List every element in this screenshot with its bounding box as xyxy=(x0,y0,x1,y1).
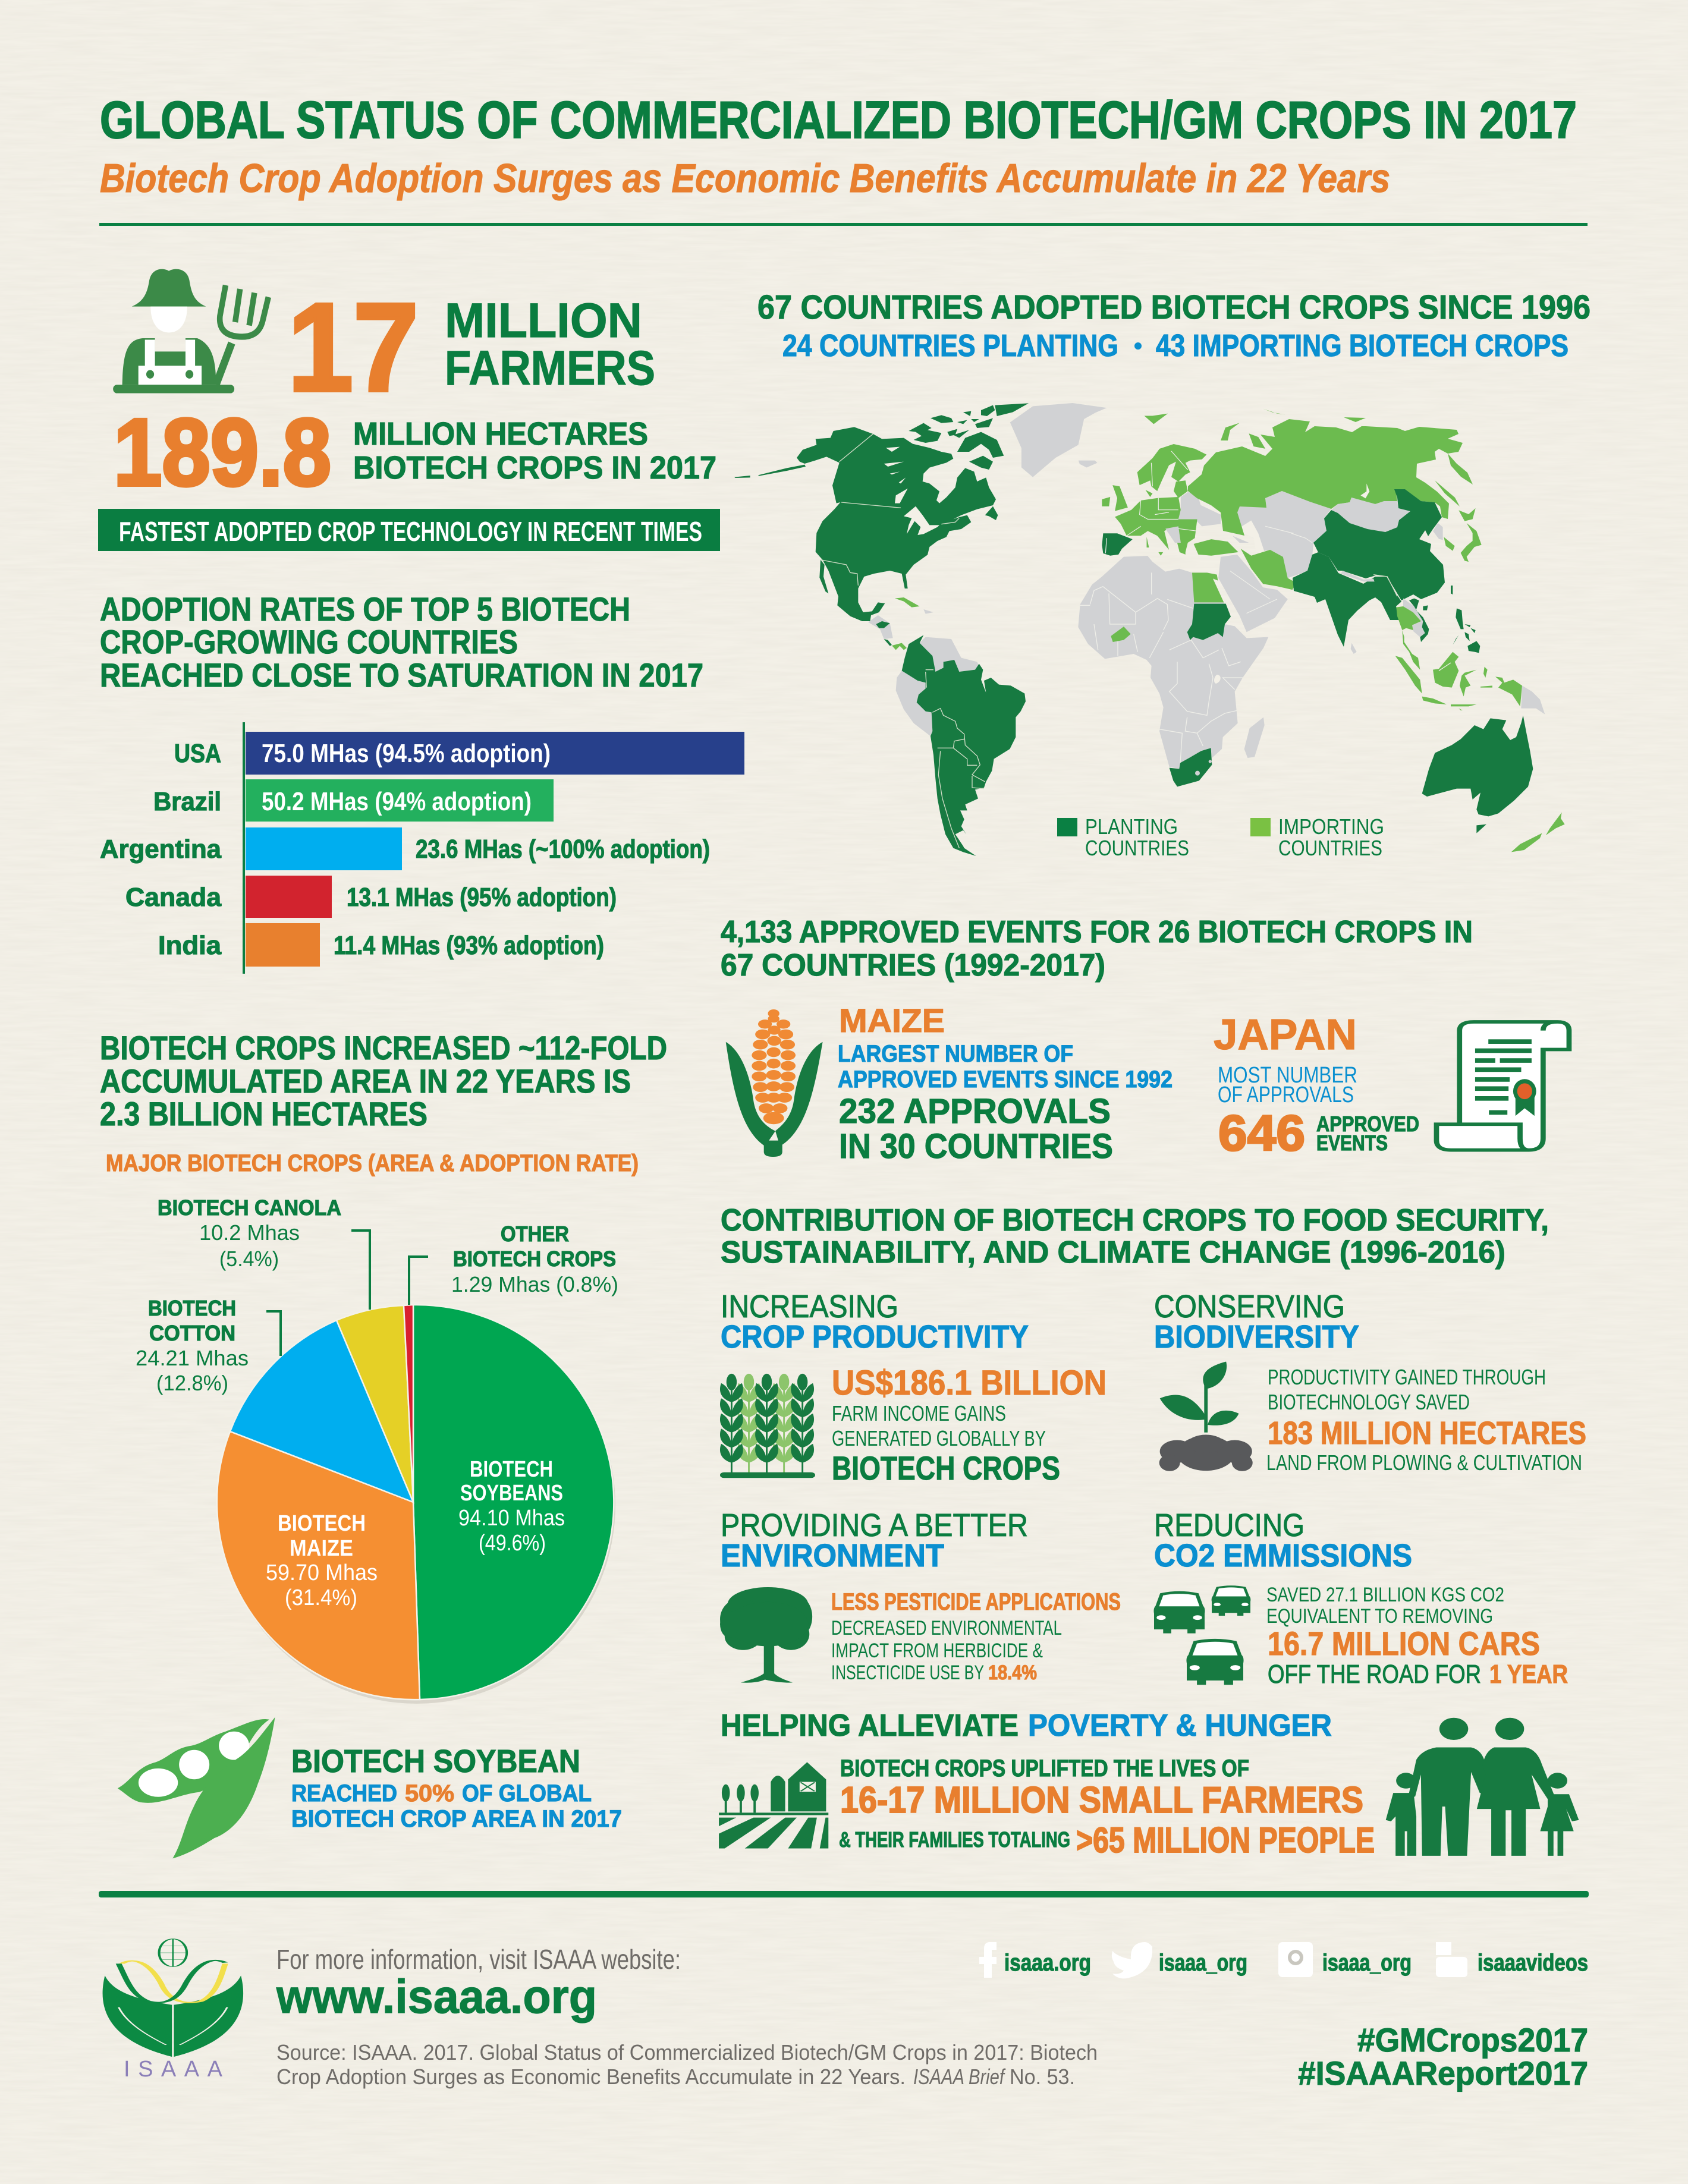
icon: cars xyxy=(1154,1585,1250,1685)
text: small farmers xyxy=(839,1755,1375,1860)
text: saved hectares: BIOTECHNOLOGY SAVED xyxy=(1268,1390,1470,1414)
panel: reducing co2 xyxy=(1154,1508,1568,1689)
label: soybeans: BIOTECH xyxy=(470,1457,553,1482)
text: biotech soybean: 50% xyxy=(405,1780,454,1807)
footer: source citation xyxy=(276,2040,1098,2089)
heading: poverty: HELPING ALLEVIATE xyxy=(721,1708,1019,1743)
heading: adoption rates: CROP-GROWING COUNTRIES xyxy=(100,623,518,660)
label: cotton: BIOTECH xyxy=(148,1296,236,1320)
logo: ISAAA: ISAAA xyxy=(124,2057,223,2082)
footer: website info xyxy=(276,1944,681,2023)
heading: poverty xyxy=(721,1708,1332,1743)
heading: approved events xyxy=(721,915,1473,983)
legend: planting countries xyxy=(1057,814,1189,860)
label: cotton: COTTON xyxy=(149,1321,235,1345)
text: saved hectares: 183 MILLION HECTARES xyxy=(1268,1415,1586,1451)
text: small farmers: >65 MILLION PEOPLE xyxy=(1076,1820,1375,1860)
heading: contribution: SUSTAINABILITY, AND CLIMATE CHANGE (1996-2016) xyxy=(721,1235,1505,1270)
text: maize: LARGEST NUMBER OF xyxy=(838,1041,1073,1067)
logo: ISAAA xyxy=(103,1939,243,2082)
social links: isaaa_org xyxy=(1159,1950,1247,1976)
heading: environment xyxy=(721,1508,1028,1574)
label: maize xyxy=(266,1511,378,1610)
legend: importing countries xyxy=(1250,814,1384,860)
bar: Brazil: Brazil xyxy=(153,787,221,816)
icon: farm xyxy=(719,1762,828,1848)
icon: soybean pods xyxy=(118,1717,275,1858)
social links: isaaa_org xyxy=(1322,1950,1412,1976)
bar: Brazil xyxy=(153,779,554,822)
bar: USA xyxy=(174,732,744,775)
heading: approved events: 67 COUNTRIES (1992-2017) xyxy=(721,948,1105,983)
map: Mongolia xyxy=(1331,498,1410,532)
text: less pesticide: INSECTICIDE USE BY xyxy=(831,1661,984,1684)
bar: India: India xyxy=(158,931,222,960)
text: less pesticide xyxy=(831,1589,1121,1684)
icon: family xyxy=(1386,1718,1579,1856)
icon: seedling xyxy=(1159,1361,1253,1471)
bar: Argentina xyxy=(100,827,710,870)
heading: contribution: CONTRIBUTION OF BIOTECH CROPS TO FOOD SECURITY, xyxy=(721,1203,1549,1238)
text: japan: JAPAN xyxy=(1214,1011,1357,1059)
legend: planting countries: COUNTRIES xyxy=(1085,836,1189,860)
heading: adoption rates: REACHED CLOSE TO SATURATION IN 2017 xyxy=(100,656,703,694)
heading: poverty: POVERTY & HUNGER xyxy=(1028,1708,1332,1743)
legend: importing countries: COUNTRIES xyxy=(1278,836,1382,860)
icon: certificate scroll xyxy=(1436,1022,1569,1150)
bar: USA: 75.0 MHas (94.5% adoption) xyxy=(262,739,551,768)
text: japan: OF APPROVALS xyxy=(1218,1082,1354,1107)
map: Europe, Middle East and Central Asia xyxy=(1079,409,1331,632)
world map xyxy=(734,403,1565,856)
text: less pesticide: IMPACT FROM HERBICIDE & xyxy=(831,1639,1043,1662)
label: canola: 10.2 Mhas xyxy=(199,1220,300,1245)
banner: fastest adopted xyxy=(98,509,720,551)
bar chart: top 5 countries xyxy=(100,722,744,974)
panel: farmers and hectares stats xyxy=(98,269,720,551)
social links: isaaa.org xyxy=(1004,1950,1091,1976)
heading: biotech crops increased xyxy=(100,1029,667,1132)
text: cars off the road: OFF THE ROAD FOR xyxy=(1268,1660,1481,1689)
label: canola: BIOTECH CANOLA xyxy=(158,1195,341,1220)
map: Greenland xyxy=(1010,403,1107,477)
map legend xyxy=(1057,814,1384,860)
text: saved hectares: PRODUCTIVITY GAINED THROUGH xyxy=(1268,1365,1546,1389)
label: soybeans: SOYBEANS xyxy=(460,1481,563,1506)
text: income gains xyxy=(832,1364,1107,1487)
text: cars off the road: EQUIVALENT TO REMOVING xyxy=(1266,1605,1493,1628)
heading: approved events: 4,133 APPROVED EVENTS FOR 26 BIOTECH CROPS IN xyxy=(721,915,1473,949)
panel: better environment xyxy=(720,1508,1121,1684)
heading: biodiversity: CONSERVING xyxy=(1154,1289,1345,1324)
heading: 67 countries: 67 COUNTRIES ADOPTED BIOTECH CROPS SINCE 1996 xyxy=(757,288,1590,326)
text: biotech soybean: BIOTECH SOYBEAN xyxy=(291,1744,580,1779)
text: income gains: FARM INCOME GAINS xyxy=(832,1401,1006,1425)
text: saved hectares: LAND FROM PLOWING & CULTIVATION xyxy=(1266,1450,1582,1475)
bar: Argentina: 23.6 MHas (~100% adoption) xyxy=(416,835,710,864)
bar: Canada: Canada xyxy=(125,883,222,912)
text: maize: APPROVED EVENTS SINCE 1992 xyxy=(838,1066,1173,1093)
million farmers label xyxy=(445,294,655,395)
panel: increasing crop productivity xyxy=(720,1289,1107,1487)
text: less pesticide: DECREASED ENVIRONMENTAL xyxy=(831,1617,1062,1639)
label: maize: 59.70 Mhas xyxy=(266,1560,378,1585)
label: maize: MAIZE xyxy=(290,1536,353,1561)
heading: environment: PROVIDING A BETTER xyxy=(721,1508,1028,1543)
bar: India xyxy=(158,923,604,967)
heading: adoption rates xyxy=(100,590,703,694)
map: China xyxy=(1313,489,1445,600)
label: maize: BIOTECH xyxy=(278,1511,366,1536)
label: other crops: 1.29 Mhas (0.8%) xyxy=(451,1272,618,1296)
banner: fastest adopted: FASTEST ADOPTED CROP TECHNOLOGY IN RECENT TIMES xyxy=(119,516,702,547)
label: maize: (31.4%) xyxy=(285,1585,357,1610)
heading: biotech crops increased: ACCUMULATED AREA IN 22 YEARS IS xyxy=(100,1062,631,1100)
text: maize: MAIZE xyxy=(839,1002,945,1039)
label: cotton xyxy=(136,1296,281,1395)
label: soybeans xyxy=(458,1457,565,1556)
bar: USA: USA xyxy=(174,739,221,768)
subheading: major biotech crops: MAJOR BIOTECH CROPS (AREA & ADOPTION RATE) xyxy=(106,1150,639,1176)
footer: source citation: Source: ISAAA. 2017. Global Status of Commercialized Biotech/GM Crops in 2017: Biotech xyxy=(276,2040,1098,2065)
text: cars off the road: 16.7 MILLION CARS xyxy=(1268,1625,1540,1662)
heading: biotech crops increased: 2.3 BILLION HECTARES xyxy=(100,1095,427,1132)
heading: 67 countries: 24 COUNTRIES PLANTING xyxy=(782,329,1118,363)
hashtags: #GMCrops2017 xyxy=(1357,2021,1588,2059)
heading: crop productivity: CROP PRODUCTIVITY xyxy=(721,1319,1029,1355)
map: North and Central America xyxy=(734,403,1029,650)
panel: conserving biodiversity xyxy=(1154,1289,1586,1475)
text: small farmers: & THEIR FAMILIES TOTALING xyxy=(839,1827,1070,1852)
label: other crops xyxy=(409,1222,618,1305)
icon: farmer with pitchfork xyxy=(113,269,268,394)
hashtags: #ISAAAReport2017 xyxy=(1298,2054,1588,2092)
text: biotech soybean: BIOTECH CROP AREA IN 2017 xyxy=(291,1806,622,1832)
footer: website info: www.isaaa.org xyxy=(276,1970,597,2023)
legend: importing countries: IMPORTING xyxy=(1278,814,1384,839)
map: Lake Baikal xyxy=(1360,483,1369,498)
text: less pesticide: 18.4% xyxy=(988,1661,1037,1684)
heading: biodiversity: BIODIVERSITY xyxy=(1154,1319,1359,1355)
label: cotton: 24.21 Mhas xyxy=(136,1346,249,1370)
bar: India: 11.4 MHas (93% adoption) xyxy=(334,931,604,960)
million hectares label: MILLION HECTARES xyxy=(353,416,648,452)
footer: website info: For more information, visit ISAAA website: xyxy=(276,1944,681,1975)
label: canola xyxy=(158,1195,370,1310)
legend: planting countries: PLANTING xyxy=(1085,814,1178,839)
text: saved hectares xyxy=(1266,1365,1586,1475)
million hectares label xyxy=(353,416,716,486)
text: japan: EVENTS xyxy=(1316,1131,1388,1155)
footer: source citation: No. 53. xyxy=(1010,2065,1075,2089)
million farmers label: MILLION xyxy=(445,294,642,348)
icon: tree xyxy=(720,1587,812,1683)
heading: 67 countries xyxy=(757,288,1590,363)
bar: Canada: 13.1 MHas (95% adoption) xyxy=(347,883,617,912)
map: Africa xyxy=(1078,556,1268,786)
text: biotech soybean xyxy=(291,1744,622,1832)
text: maize: IN 30 COUNTRIES xyxy=(839,1127,1113,1166)
subtitle: Biotech Crop Adoption Surges as Economic Benefits Accumulate in 22 Years xyxy=(100,156,1390,201)
heading: crop productivity: INCREASING xyxy=(721,1289,898,1324)
social links xyxy=(979,1942,1588,1978)
text: less pesticide: LESS PESTICIDE APPLICATIONS xyxy=(831,1589,1121,1615)
text: income gains: US$186.1 BILLION xyxy=(832,1364,1107,1402)
bar: Canada xyxy=(125,876,617,918)
icon: twitter xyxy=(1112,1942,1152,1978)
text: japan: 646 xyxy=(1218,1105,1305,1161)
map: South America xyxy=(896,635,1026,856)
heading: crop productivity xyxy=(721,1289,1029,1355)
heading: contribution xyxy=(721,1203,1549,1270)
text: cars off the road: 1 YEAR xyxy=(1489,1660,1568,1689)
social links: isaaavideos xyxy=(1478,1950,1588,1976)
pie chart: biotech crops xyxy=(136,1195,618,1704)
map: South Asia xyxy=(1293,552,1401,647)
heading: co2 xyxy=(1154,1508,1412,1574)
big number 17: 17 xyxy=(288,277,419,417)
icon: wheat xyxy=(720,1374,815,1478)
bar: Brazil: 50.2 MHas (94% adoption) xyxy=(262,787,532,816)
icon: youtube xyxy=(1436,1942,1467,1977)
label: other crops: OTHER xyxy=(501,1222,569,1246)
map: Russia xyxy=(1188,417,1473,536)
icon: facebook xyxy=(979,1942,997,1978)
map: East Asia details xyxy=(1341,508,1482,596)
text: income gains: GENERATED GLOBALLY BY xyxy=(832,1426,1046,1450)
footer: source citation: ISAAA Brief xyxy=(913,2065,1006,2089)
map: Southeast Asia and Oceania xyxy=(1351,599,1565,852)
text: japan xyxy=(1214,1011,1419,1161)
text: cars off the road: SAVED 27.1 BILLION KGS CO2 xyxy=(1266,1584,1504,1606)
heading: biodiversity xyxy=(1154,1289,1359,1355)
text: maize xyxy=(838,1002,1173,1166)
text: maize: 232 APPROVALS xyxy=(839,1092,1111,1131)
million hectares label: BIOTECH CROPS IN 2017 xyxy=(353,450,716,486)
icon: instagram xyxy=(1278,1942,1313,1977)
label: soybeans: (49.6%) xyxy=(479,1531,546,1556)
footer: source citation: Crop Adoption Surges as Economic Benefits Accumulate in 22 Years. xyxy=(276,2065,906,2089)
text: biotech soybean: OF GLOBAL xyxy=(462,1780,592,1807)
million farmers label: FARMERS xyxy=(445,341,655,395)
icon: maize cob xyxy=(726,1009,823,1157)
text: cars off the road xyxy=(1266,1584,1568,1689)
hashtags xyxy=(1298,2021,1588,2092)
text: japan: APPROVED xyxy=(1316,1112,1419,1136)
heading: 67 countries: 43 IMPORTING BIOTECH CROPS xyxy=(1156,329,1568,363)
text: small farmers: BIOTECH CROPS UPLIFTED THE LIVES OF xyxy=(840,1755,1249,1782)
heading: co2: CO2 EMMISSIONS xyxy=(1154,1538,1412,1574)
heading: environment: ENVIRONMENT xyxy=(721,1538,944,1574)
big number 189.8: 189.8 xyxy=(114,399,331,505)
heading: biotech crops increased: BIOTECH CROPS INCREASED ~112-FOLD xyxy=(100,1029,667,1066)
label: other crops: BIOTECH CROPS xyxy=(453,1247,616,1271)
label: canola: (5.4%) xyxy=(219,1247,279,1271)
text: income gains: BIOTECH CROPS xyxy=(832,1449,1060,1487)
heading: adoption rates: ADOPTION RATES OF TOP 5 BIOTECH xyxy=(100,590,630,628)
bar: Argentina: Argentina xyxy=(100,835,222,864)
text: japan: MOST NUMBER xyxy=(1218,1063,1357,1088)
heading: co2: REDUCING xyxy=(1154,1508,1304,1543)
panel: poverty and hunger xyxy=(719,1708,1579,1860)
label: cotton: (12.8%) xyxy=(156,1371,228,1395)
text: biotech soybean: REACHED xyxy=(291,1780,397,1807)
text: small farmers: 16-17 MILLION SMALL FARMERS xyxy=(840,1780,1363,1821)
label: soybeans: 94.10 Mhas xyxy=(458,1506,565,1531)
